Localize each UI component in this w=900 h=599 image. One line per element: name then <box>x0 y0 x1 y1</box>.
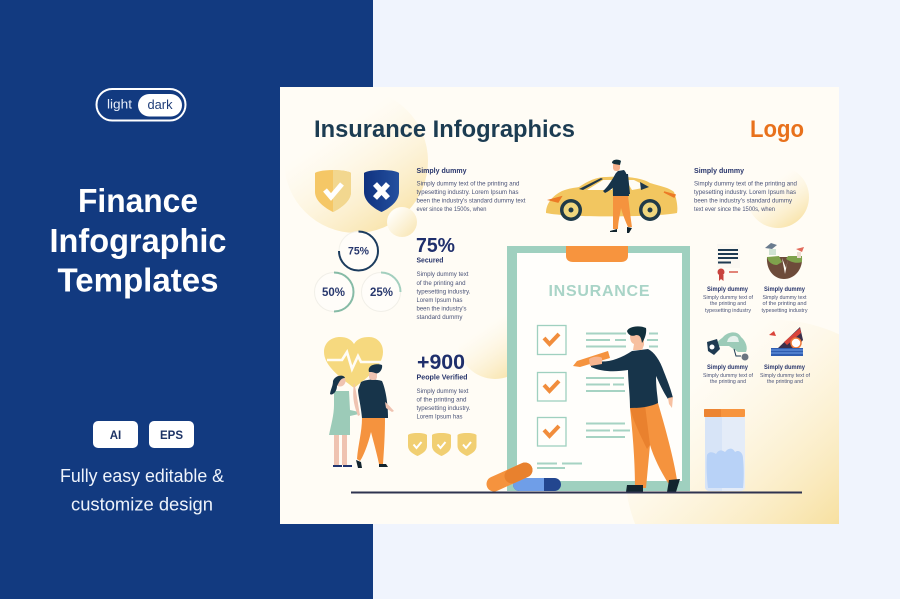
icons grid: wrecked car <box>707 332 748 360</box>
stat block: 75% secured: Lorem Ipsum has <box>416 297 462 304</box>
stat block: 75% secured: of the printing and <box>416 280 466 287</box>
text block: wrecked car caption: the printing and <box>710 379 746 385</box>
illustration: couple with heart <box>324 337 394 468</box>
subtitle: Fully easy editable & <box>60 466 224 486</box>
stat block: +900 people verified: Simply dummy text <box>416 388 469 395</box>
checklist text lines <box>537 334 658 468</box>
text block: document icon caption: typesetting industry <box>705 308 751 314</box>
clipboard clip <box>566 246 628 262</box>
format badge: AI <box>93 421 138 448</box>
text block: top right description: Simply dummy <box>694 166 745 175</box>
progress ring: 50%: 50% <box>322 287 345 299</box>
stat block: +900 people verified: +900 <box>417 351 465 374</box>
blue capsule <box>513 478 561 491</box>
text block: document icon caption: Simply dummy text of <box>703 295 754 301</box>
text block: shields description: ever since the 1500s, when <box>416 206 487 213</box>
main heading: Infographic <box>50 222 226 259</box>
text block: wrecked car caption <box>703 364 754 385</box>
progress ring: 75%: 75% <box>348 246 369 258</box>
left navy panel <box>0 0 373 599</box>
progress ring: 25% <box>362 272 400 312</box>
icon: navy shield with cross <box>364 170 399 212</box>
text block: earthquake icon caption <box>762 286 808 314</box>
text block: top right description: Simply dummy text of the printing and <box>694 180 798 188</box>
text block: top right description: been the industry's standard dummy <box>694 198 793 204</box>
format badge: EPS: EPS <box>160 430 183 442</box>
format badge: EPS <box>149 421 194 448</box>
progress ring: 75% <box>339 232 378 270</box>
stat block: +900 people verified <box>416 351 471 420</box>
text block: shields description: typesetting industry. Lorem Ipsum has <box>416 189 518 196</box>
stat block: +900 people verified: Lorem Ipsum has <box>416 414 462 420</box>
progress ring: 25%: 25% <box>370 287 393 299</box>
progress ring: 50% <box>314 272 354 312</box>
pill jar <box>704 409 745 491</box>
stat block: +900 people verified: People Verified <box>416 372 468 382</box>
main heading <box>50 182 226 298</box>
large orange pill <box>494 470 525 484</box>
logo: Logo <box>750 116 804 143</box>
text block: sinking ship caption <box>760 364 811 385</box>
stat block: 75% secured <box>416 235 471 321</box>
text block: sinking ship caption: Simply dummy text of <box>760 373 811 379</box>
text block: top right description <box>694 166 798 213</box>
orange check marks <box>544 334 559 436</box>
clipboard with checklist <box>507 246 690 491</box>
text block: wrecked car caption: Simply dummy text of <box>703 373 754 379</box>
text block: shields description: Simply dummy <box>416 166 467 175</box>
illustration: yellow car with man <box>546 160 677 233</box>
text block: earthquake icon caption: typesetting industry <box>762 308 808 314</box>
ground line <box>351 492 802 494</box>
icon row: three small shields <box>408 433 476 456</box>
toggle: light / dark: dark <box>148 97 173 112</box>
toggle: light / dark <box>96 89 186 120</box>
stat block: +900 people verified: typesetting industry. <box>416 405 471 412</box>
icons grid: sinking ship <box>769 327 803 356</box>
text block: top right description: typesetting industry. Lorem Ipsum has <box>694 189 796 196</box>
format badge: AI: AI <box>110 430 121 442</box>
stat block: 75% secured: Simply dummy text <box>416 271 469 278</box>
subtitle: customize design <box>71 494 213 514</box>
text block: sinking ship caption: the printing and <box>767 379 803 385</box>
text block: document icon caption <box>703 286 754 314</box>
illustration: man with pencil <box>573 326 680 492</box>
text block: shields description: Simply dummy text of the printing and <box>416 180 520 188</box>
text block: sinking ship caption: Simply dummy <box>764 364 805 371</box>
card title: Insurance Infographics <box>314 116 575 143</box>
text block: document icon caption: Simply dummy <box>707 286 748 293</box>
toggle: light / dark: light <box>107 96 132 112</box>
checkboxes <box>538 326 566 446</box>
text block: shields description: been the industry's standard dummy text <box>416 198 526 204</box>
stat block: 75% secured: standard dummy <box>416 314 463 321</box>
text block: earthquake icon caption: Simply dummy text <box>762 295 807 301</box>
clipboard heading: INSURANCE <box>548 283 650 300</box>
main heading: Templates <box>58 262 218 298</box>
text block: earthquake icon caption: Simply dummy <box>764 286 805 293</box>
text block: top right description: text ever since the 1500s, when <box>694 206 776 213</box>
text block: shields description <box>416 166 526 213</box>
stat block: 75% secured: been the industry's <box>416 306 466 312</box>
subtitle <box>60 466 224 514</box>
icons grid: document <box>718 249 738 281</box>
main heading: Finance <box>78 182 198 219</box>
infographic card <box>280 87 839 524</box>
text block: earthquake icon caption: of the printing and <box>762 301 807 307</box>
icons grid: earthquake <box>765 243 804 279</box>
stat block: 75% secured: Secured <box>416 256 444 264</box>
text block: wrecked car caption: Simply dummy <box>707 364 748 371</box>
icon: yellow shield with check <box>315 170 351 212</box>
text block: document icon caption: the printing and <box>710 301 746 307</box>
stat block: +900 people verified: of the printing and <box>416 396 467 404</box>
stat block: 75% secured: 75% <box>416 235 455 257</box>
stat block: 75% secured: typesetting industry. <box>416 288 471 296</box>
